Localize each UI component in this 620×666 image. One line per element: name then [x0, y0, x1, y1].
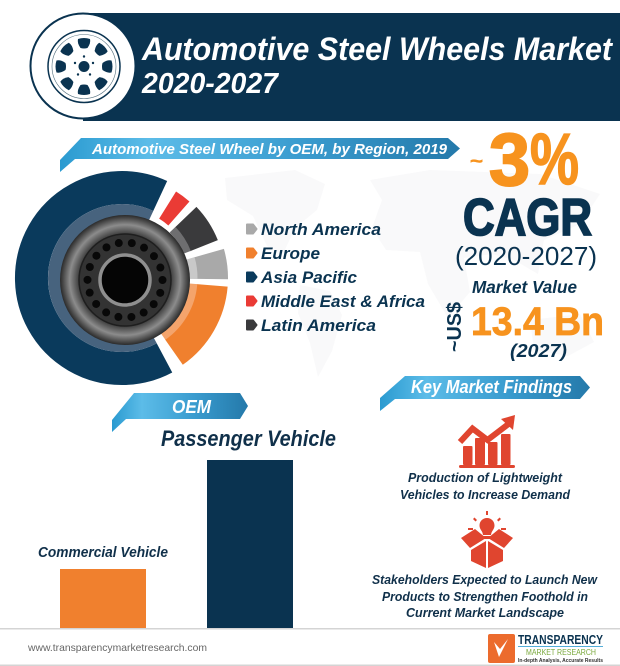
CAGR value: 3 [489, 118, 530, 201]
segment: Asia Pacific [31, 188, 165, 369]
market value year: (2027) [510, 340, 567, 361]
CAGR value: % [530, 120, 579, 200]
legend [247, 220, 425, 335]
finding 2 [372, 511, 598, 620]
CAGR callout [455, 118, 597, 271]
currency: ~US$ [444, 302, 466, 352]
CAGR period: (2020-2027) [455, 241, 597, 271]
finding text: Stakeholders Expected to Launch New [372, 572, 598, 587]
market value label: Market Value [472, 277, 577, 297]
header band [30, 13, 620, 121]
finding text: Vehicles to Increase Demand [400, 487, 571, 502]
finding text: Current Market Landscape [406, 605, 564, 620]
segment: Latin America [173, 217, 204, 252]
market value: 13.4 Bn [471, 300, 604, 344]
ribbon: OEM: OEM [172, 397, 212, 417]
finding text: Production of Lightweight [408, 470, 563, 485]
CAGR value: ~ [470, 151, 483, 171]
ribbon: Key Market Findings [380, 376, 590, 411]
market value callout [444, 277, 604, 361]
title [141, 31, 613, 100]
footer [0, 628, 620, 666]
finding text [372, 572, 598, 620]
segment: North America [189, 253, 213, 279]
finding 1 [400, 415, 571, 502]
bar: Commercial Vehicle: Commercial Vehicle [38, 545, 168, 561]
legend item: North America: North America [261, 220, 381, 239]
wheel photo [60, 215, 190, 345]
donut chart: share by region [31, 188, 213, 369]
ribbon: chart heading [60, 138, 460, 172]
ribbon: chart heading: Automotive Steel Wheel by OEM, by Region, 2019 [91, 141, 448, 158]
segment: Europe [162, 284, 212, 352]
finding text: Products to Strengthen Foothold in [382, 589, 588, 604]
icon: steel wheel [30, 14, 136, 118]
legend item: Asia Pacific: Asia Pacific [260, 268, 358, 287]
finding text [400, 470, 571, 502]
CAGR value [470, 118, 579, 201]
logo [488, 632, 603, 664]
bar: Passenger Vehicle: Passenger Vehicle [161, 426, 336, 451]
segment: Middle East and Africa [168, 205, 179, 214]
ribbon: OEM [112, 393, 248, 432]
bar: Commercial Vehicle [38, 545, 168, 628]
title: 2020-2027 [141, 68, 280, 100]
website url: www.transparencymarketresearch.com [27, 642, 207, 654]
logo: MARKET RESEARCH [526, 648, 596, 657]
logo: In-depth Analysis, Accurate Results [518, 658, 603, 664]
icon: idea box [461, 511, 513, 568]
legend item: Latin America: Latin America [261, 316, 376, 335]
legend item: Europe: Europe [261, 244, 320, 263]
background world map [225, 170, 600, 377]
legend item: Middle East and Africa: Middle East & Africa [261, 292, 425, 311]
bar chart: OEM [38, 426, 336, 628]
ribbon: Key Market Findings: Key Market Findings [411, 377, 572, 397]
CAGR label: CAGR [463, 189, 592, 247]
icon: rising bar chart [459, 415, 515, 468]
bar: Passenger Vehicle [161, 426, 336, 628]
